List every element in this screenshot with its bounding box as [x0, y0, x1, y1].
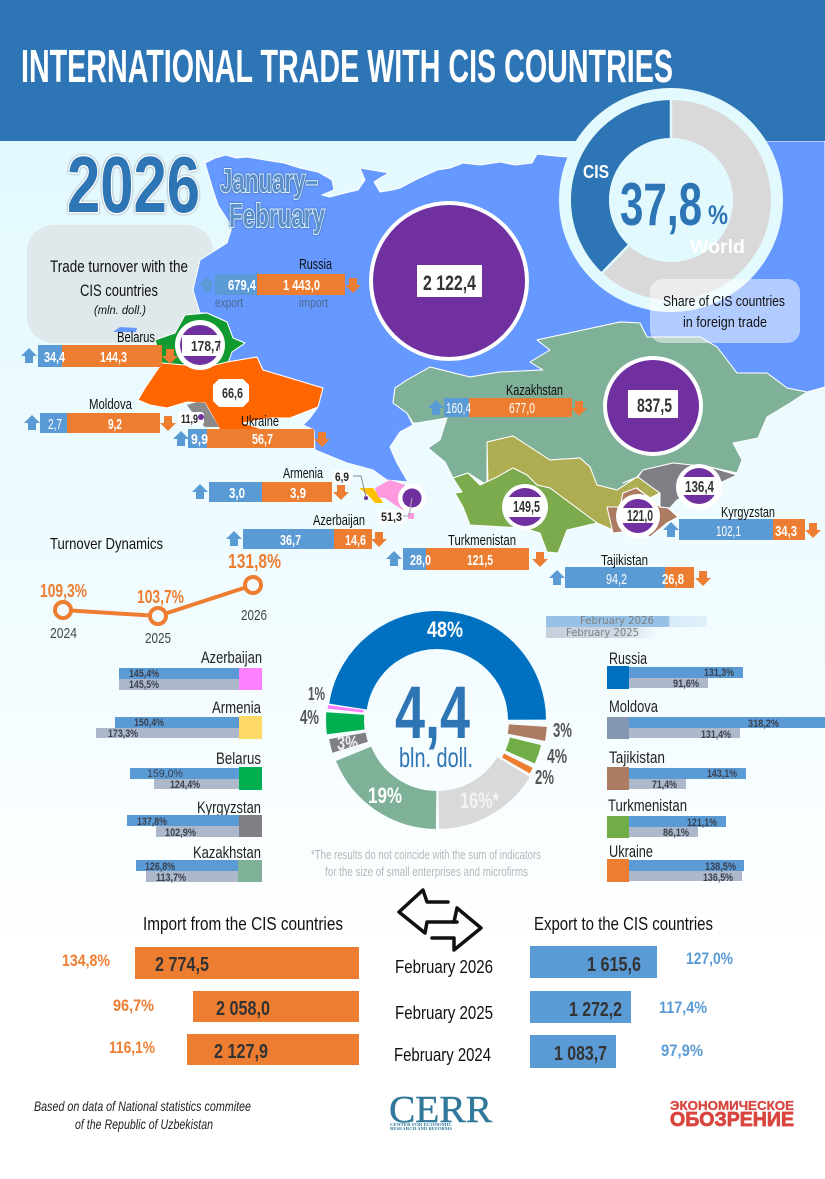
marker: Tajikistan turnover: 121,0: [627, 508, 653, 525]
growth bars: Turkmenistan: [607, 796, 726, 839]
panel: trade turnover caption background: [27, 225, 213, 343]
map: Tajikistan: [607, 488, 678, 537]
donut: share of CIS countries: 37,8: [620, 171, 702, 238]
marker: Kyrgyzstan turnover: 136,4: [685, 479, 714, 496]
import bars: 2 127,9: [214, 1041, 268, 1063]
bar: Ukraine: Ukraine: [241, 413, 279, 430]
line chart: turnover dynamics: 2026: [241, 607, 267, 624]
marker: Ukraine turnover: [213, 379, 249, 407]
bar: Armenia: [192, 465, 349, 502]
growth bars: Azerbaijan: 145,4%: [129, 668, 159, 680]
donut labels: 2%: [535, 767, 554, 789]
source note: of the Republic of Uzbekistan: [75, 1116, 213, 1132]
bar: Russia: 679,4: [228, 277, 256, 294]
growth bars: Armenia: 173,3%: [108, 728, 138, 740]
bar: Belarus: 144,3: [100, 349, 127, 366]
growth bars: Russia: 91,6%: [673, 678, 699, 690]
export bars: 127,0%: [686, 949, 733, 968]
growth bars: Kazakhstan: 113,7%: [156, 872, 186, 884]
growth bars: Moldova: 318,2%: [748, 718, 779, 730]
bar: Moldova: 2,7: [48, 416, 62, 433]
period labels: February 2024: [394, 1045, 491, 1065]
line chart: turnover dynamics: [40, 551, 281, 647]
bar: Turkmenistan: 28,0: [410, 552, 431, 569]
growth bars: Turkmenistan: 121,1%: [687, 817, 717, 829]
period labels: February 2025: [395, 1003, 493, 1023]
marker: Azerbaijan turnover: [379, 484, 426, 524]
growth bars: Azerbaijan: Azerbaijan: [201, 648, 262, 667]
growth bars: Kyrgyzstan: Kyrgyzstan: [197, 798, 261, 817]
donut: share of CIS countries: [556, 85, 786, 315]
bar: Moldova: Moldova: [89, 396, 132, 413]
map of CIS countries: [113, 141, 825, 553]
footnote: *The results do not coincide with the sum of indicators: [311, 847, 541, 862]
growth bars: Kyrgyzstan: [127, 798, 262, 839]
icon: import/export arrows: [399, 890, 481, 950]
bar: Azerbaijan: [226, 512, 387, 549]
growth bars: Russia: 131,3%: [704, 667, 734, 679]
period labels: February 2026: [395, 957, 493, 977]
growth bars: Kazakhstan: Kazakhstan: [193, 843, 261, 862]
growth bars: Tajikistan: 143,1%: [707, 768, 737, 780]
growth bars: Azerbaijan: 145,5%: [129, 679, 159, 691]
bar: Belarus: 34,4: [44, 349, 65, 366]
bar: Ukraine: [173, 413, 330, 448]
bar: Tajikistan: 26,8: [662, 571, 684, 588]
bar: Russia: [199, 256, 361, 310]
growth bars: Ukraine: 138,5%: [705, 861, 736, 873]
map: Kyrgyzstan: [638, 463, 737, 508]
growth bars: Belarus: 124,4%: [170, 779, 200, 791]
marker: Kazakhstan turnover: [603, 356, 703, 456]
growth bars: Kyrgyzstan: 102,9%: [165, 827, 196, 839]
export bars: [530, 946, 733, 1068]
import bars: 116,1%: [109, 1038, 155, 1057]
growth bars: Armenia: Armenia: [212, 698, 261, 717]
donut labels: 3%: [553, 720, 572, 742]
map: Russia: [193, 141, 825, 482]
growth bars: Tajikistan: Tajikistan: [609, 748, 665, 767]
bar: Ukraine: 9,9: [191, 431, 208, 448]
bar: Turkmenistan: 121,5: [467, 552, 493, 569]
bar: Tajikistan: Tajikistan: [601, 552, 648, 569]
logo: CERR: CENTER FOR ECONOMIC: [390, 1122, 452, 1127]
donut: share of CIS countries: World: [690, 237, 745, 258]
bar: Belarus: [21, 329, 178, 367]
bar: Turkmenistan: [386, 532, 548, 570]
legend: February 2026 / February 2025: February 2026: [580, 614, 654, 627]
map: Belarus: [155, 313, 245, 368]
bar: Azerbaijan: 36,7: [280, 532, 301, 549]
donut total: bln. doll.: [399, 742, 473, 773]
marker: Belarus turnover: [175, 320, 225, 370]
growth bars: Ukraine: [607, 842, 744, 884]
bar: Tajikistan: [549, 552, 711, 588]
line chart: turnover dynamics: 131,8%: [228, 551, 281, 573]
donut labels: 16%*: [460, 788, 499, 813]
callout: share of CIS countries in foreign trade: in foreign trade: [683, 314, 767, 331]
growth bars: Ukraine: Ukraine: [609, 842, 653, 861]
import bars: [62, 947, 359, 1065]
growth bars: Turkmenistan: 86,1%: [663, 827, 689, 839]
logo: CERR: RESEARCH AND REFORMS: [390, 1126, 453, 1131]
footnote: [311, 847, 541, 879]
logo: Economic Review: ЭКОНОМИЧЕСКОЕ: [670, 1098, 794, 1113]
donut labels: 1%: [308, 684, 325, 704]
bar: Azerbaijan: Azerbaijan: [313, 512, 365, 529]
donut labels: 3%: [337, 733, 358, 755]
export bars: 97,9%: [661, 1041, 703, 1060]
caption: trade turnover: [50, 257, 188, 317]
map: Kazakhstan: [393, 322, 807, 490]
logo: CERR: CERR: [389, 1089, 493, 1131]
bar: Armenia: 3,9: [290, 485, 306, 502]
donut labels: 4%: [300, 707, 319, 729]
growth bars: Moldova: 131,4%: [701, 729, 731, 741]
bar: Moldova: [24, 396, 176, 433]
bar: Tajikistan: 94,2: [606, 571, 627, 588]
heading: period: [220, 162, 325, 234]
marker: Ukraine turnover: 66,6: [222, 385, 243, 402]
growth bars: Kazakhstan: [136, 843, 262, 884]
bar: Azerbaijan: 14,6: [345, 532, 366, 549]
bar: Russia: Russia: [299, 256, 332, 273]
caption: trade turnover: CIS countries: [80, 281, 158, 300]
growth bars: Russia: Russia: [609, 649, 647, 668]
growth bars: Turkmenistan: Turkmenistan: [608, 796, 687, 815]
source note: [34, 1098, 251, 1132]
donut total: [395, 671, 473, 773]
heading: year: 2026: [67, 140, 200, 229]
marker: Armenia turnover: [333, 470, 368, 500]
growth bars: Kazakhstan: 126,8%: [145, 861, 175, 873]
bar: Turkmenistan: Turkmenistan: [448, 532, 516, 549]
legend: February 2026 / February 2025: February 2025: [566, 626, 639, 639]
marker: Turkmenistan turnover: [502, 484, 548, 530]
map: Azerbaijan: [375, 480, 405, 510]
bar: Russia: import: [299, 295, 328, 310]
line chart: turnover dynamics: 2025: [145, 630, 171, 647]
bar: Kazakhstan: [428, 382, 587, 417]
export bars: 1 083,7: [554, 1043, 607, 1065]
marker: Kyrgyzstan turnover: [676, 464, 722, 510]
bar: Moldova: 9,2: [108, 416, 122, 433]
bar: Kazakhstan: 677,0: [509, 400, 535, 417]
bar: Kyrgyzstan: 102,1: [716, 523, 741, 540]
heading: period: January–: [220, 162, 318, 199]
heading: period: February: [229, 197, 325, 234]
callout: share of CIS countries in foreign trade: [650, 279, 800, 343]
donut labels: 19%: [368, 783, 402, 808]
growth bars: Moldova: [607, 697, 825, 741]
bar: Armenia: 3,0: [229, 485, 245, 502]
bar: Kyrgyzstan: 34,3: [775, 523, 797, 540]
line chart: turnover dynamics: 2024: [50, 625, 77, 642]
period labels: [394, 957, 493, 1065]
caption: trade turnover: Trade turnover with the: [50, 257, 188, 276]
map: Turkmenistan: [453, 468, 597, 553]
footnote: for the size of small enterprises and microfirms: [325, 864, 528, 879]
bar: Russia: export: [215, 295, 243, 310]
bar: Kazakhstan: Kazakhstan: [506, 382, 563, 399]
marker: Belarus turnover: 178,7: [191, 338, 221, 355]
header band: [0, 0, 825, 141]
bar: Russia: 1 443,0: [283, 277, 320, 294]
donut: share of CIS countries: %: [708, 200, 728, 230]
heading: turnover dynamics: Turnover Dynamics: [50, 536, 163, 553]
marker: Tajikistan turnover: [616, 494, 660, 538]
growth bars: Kyrgyzstan: 137,8%: [137, 816, 167, 828]
legend: February 2026 / February 2025: [546, 614, 707, 639]
heading: import: Import from the CIS countries: [143, 914, 343, 934]
donut: share of CIS countries: CIS: [583, 162, 609, 182]
growth bars: Tajikistan: 71,4%: [652, 779, 677, 791]
map: Kaliningrad: [113, 327, 137, 332]
import bars: 96,7%: [113, 996, 154, 1015]
bar: Kazakhstan: 160,4: [446, 400, 471, 417]
marker: Kazakhstan turnover: 837,5: [637, 396, 672, 417]
line chart: turnover dynamics: 109,3%: [40, 581, 87, 601]
marker: Turkmenistan turnover: 149,5: [513, 499, 540, 516]
donut labels: 48%: [427, 617, 463, 642]
donut total: 4,4: [395, 671, 470, 754]
marker: Armenia turnover: 6,9: [335, 470, 349, 484]
map: Ukraine: [138, 357, 323, 430]
caption: trade turnover: (mln. doll.): [94, 303, 146, 317]
bar: Ukraine: 56,7: [252, 431, 273, 448]
bar: Kyrgyzstan: [663, 504, 821, 540]
marker: Azerbaijan turnover: 51,3: [381, 510, 402, 524]
map: Uzbekistan: [487, 436, 660, 530]
heading: export: Export to the CIS countries: [534, 914, 713, 934]
marker: Moldova turnover: 11,9: [181, 412, 198, 426]
growth bars: Russia: [607, 649, 743, 690]
growth bars: Azerbaijan: [119, 648, 262, 691]
logo: Economic Review: [670, 1098, 794, 1131]
callout: share of CIS countries in foreign trade: Share of CIS countries: [663, 293, 785, 310]
bar: Kyrgyzstan: Kyrgyzstan: [721, 504, 775, 521]
marker: Russia turnover: 2 122,4: [423, 272, 476, 295]
growth bars: Tajikistan: [607, 748, 746, 791]
marker: Russia turnover: [369, 201, 529, 361]
import bars: 2 058,0: [216, 998, 270, 1020]
export bars: 1 615,6: [587, 954, 641, 976]
import bars: 2 774,5: [155, 954, 209, 976]
bar: Armenia: Armenia: [283, 465, 323, 482]
map: Moldova: [187, 402, 219, 427]
map: Armenia: [359, 488, 383, 503]
source note: Based on data of National statistics commitee: [34, 1098, 251, 1114]
growth bars: Ukraine: 136,5%: [703, 872, 733, 884]
growth bars: Belarus: Belarus: [216, 749, 261, 768]
growth bars: Belarus: 159,0%: [147, 768, 183, 780]
growth bars: Belarus: [130, 749, 262, 791]
export bars: 1 272,2: [569, 999, 622, 1021]
donut labels: [300, 617, 572, 813]
growth bars: Moldova: Moldova: [609, 697, 658, 716]
export bars: 117,4%: [659, 998, 707, 1017]
donut chart: share of countries in trade: [313, 596, 561, 844]
bar: Belarus: Belarus: [117, 329, 155, 346]
line chart: turnover dynamics: 103,7%: [137, 587, 184, 607]
growth bars: Armenia: [96, 698, 262, 740]
growth bars: Armenia: 150,4%: [134, 717, 164, 729]
donut labels: 4%: [547, 746, 567, 768]
import bars: 134,8%: [62, 951, 110, 970]
logo: Economic Review: ОБОЗРЕНИЕ: [670, 1109, 794, 1131]
